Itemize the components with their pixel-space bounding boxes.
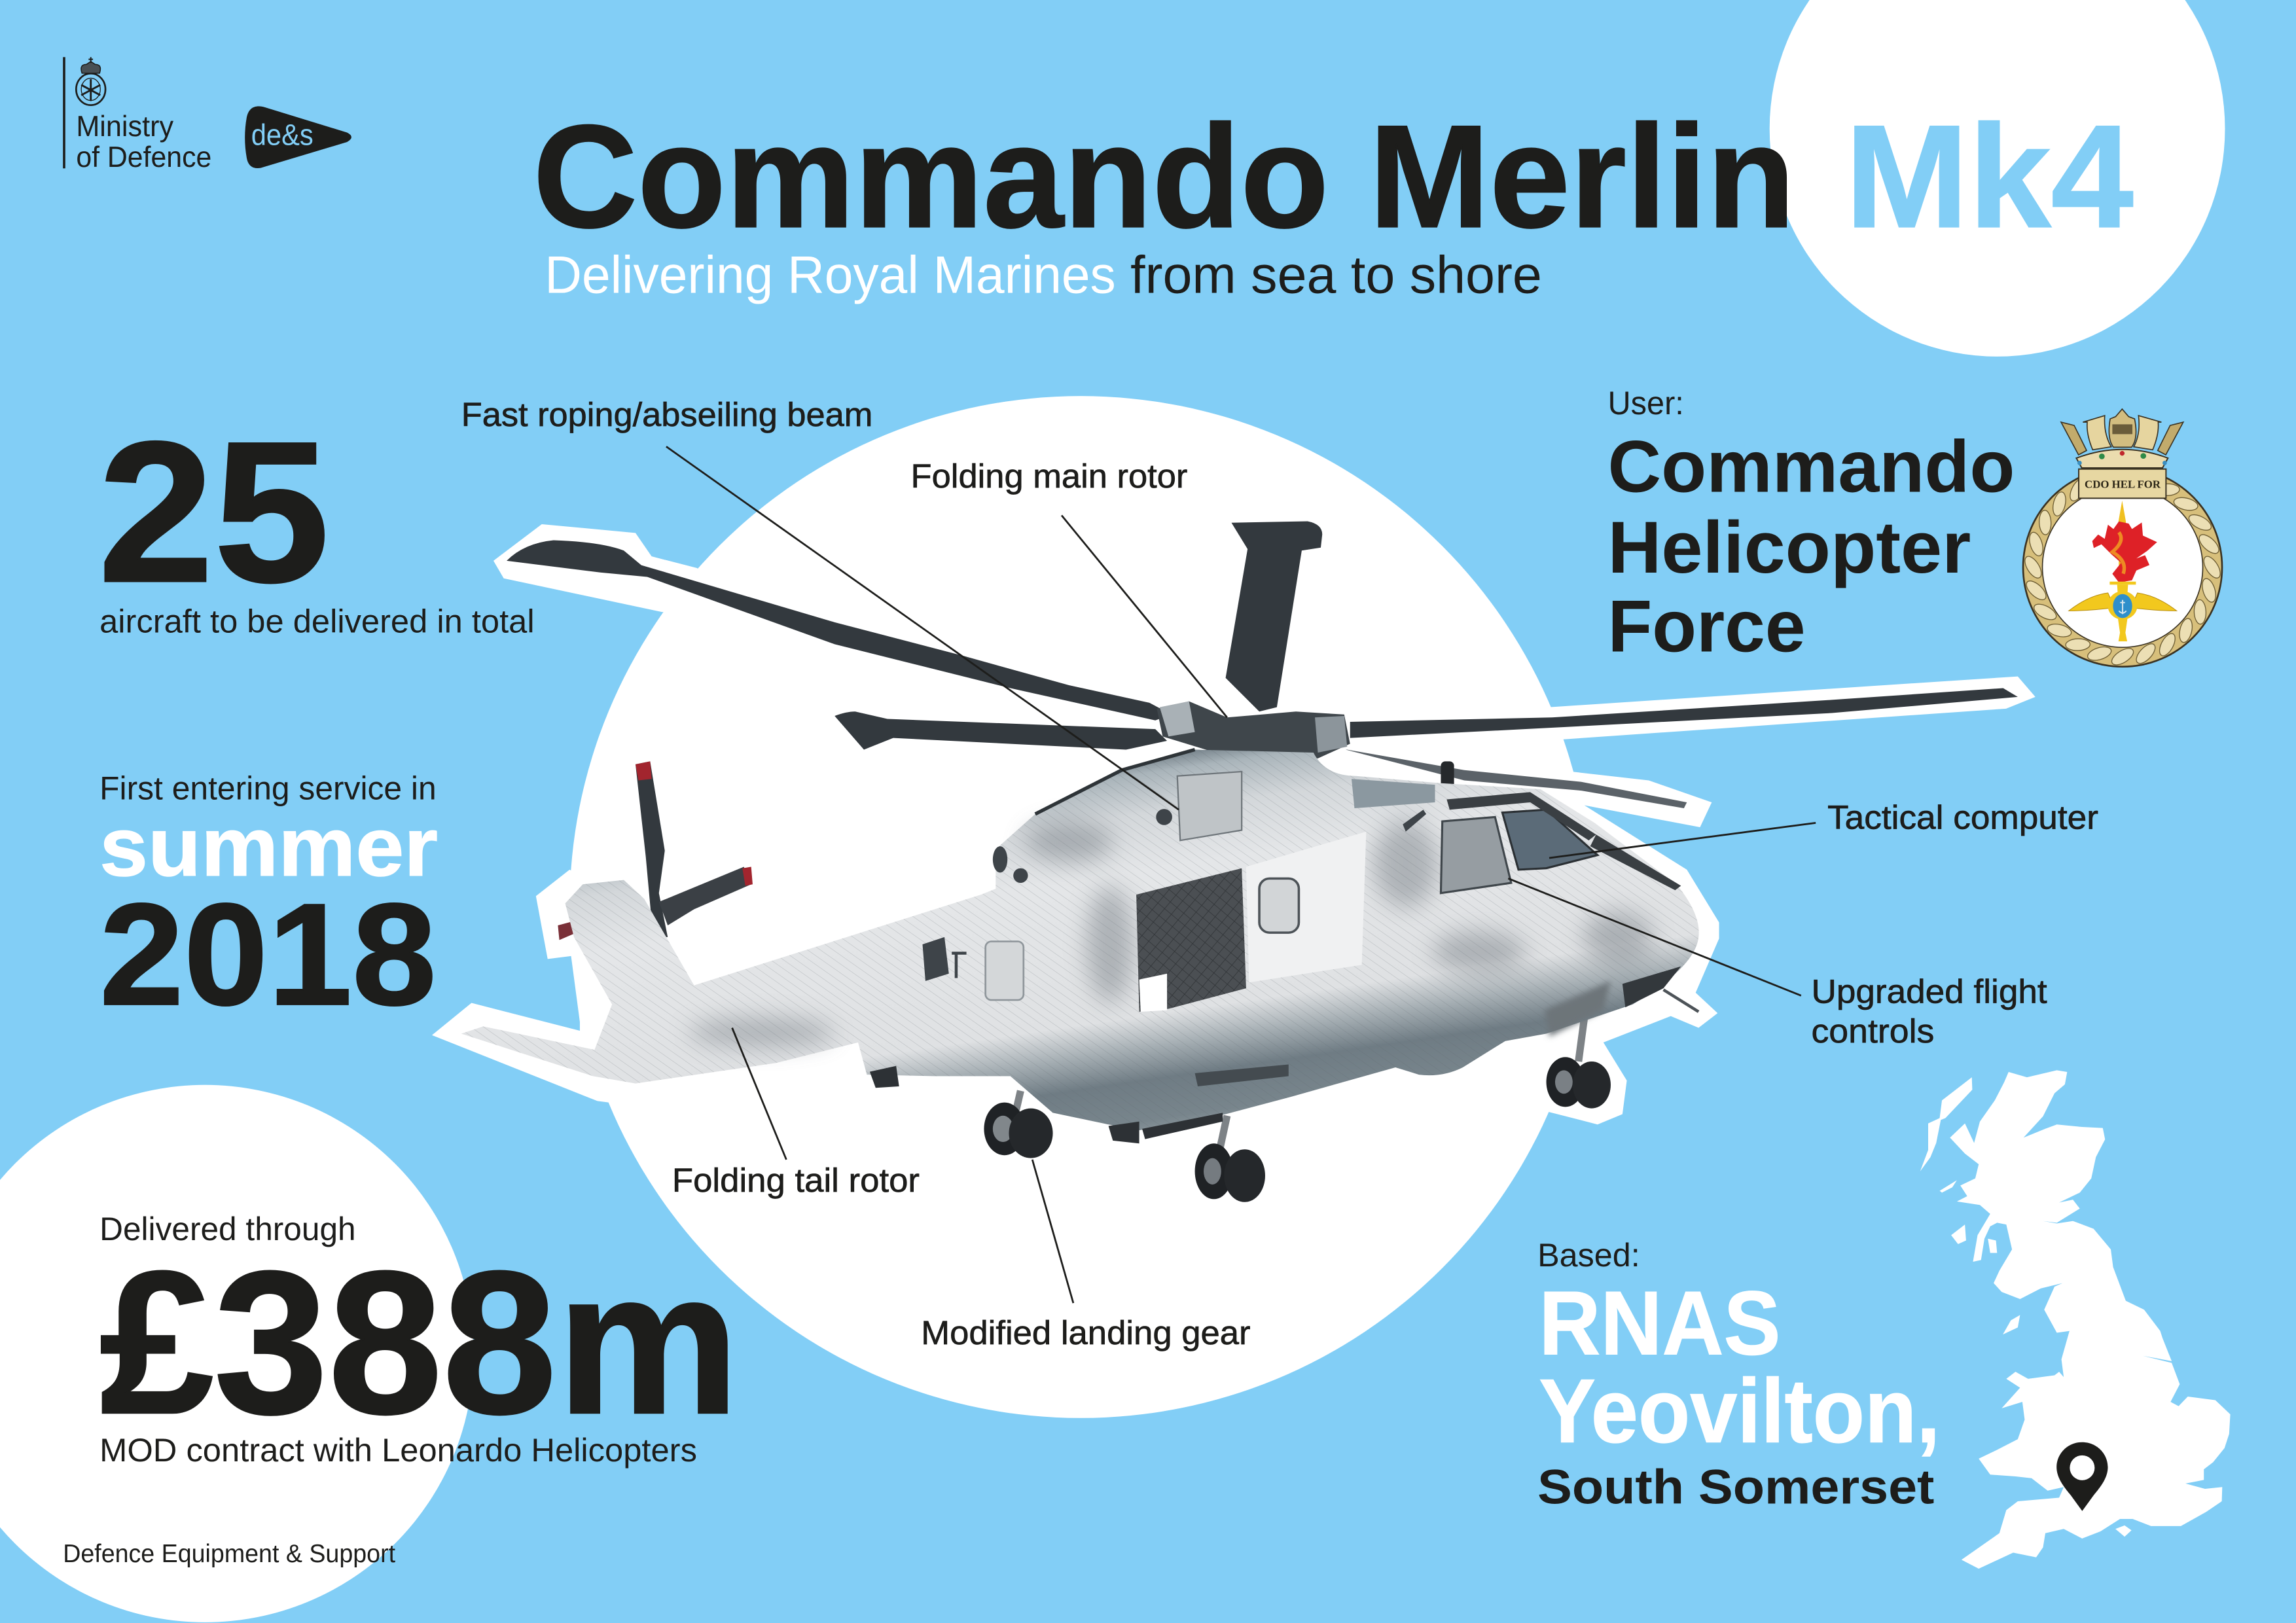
icon: MoD crest [76, 57, 105, 105]
subtitle [545, 245, 1542, 304]
logo: Ministry of Defence [63, 57, 211, 173]
user block [1607, 384, 2015, 668]
white circle: bottom left [0, 1085, 474, 1622]
wings and sword [2069, 582, 2177, 641]
base block: Based: [1537, 1236, 1640, 1274]
stat: summer 2018 [99, 770, 438, 1035]
main rotor blades [507, 521, 2018, 749]
landing gear [984, 1018, 1611, 1202]
white halo around helicopter [432, 524, 2036, 1142]
fuselage marks [922, 809, 1426, 981]
callout: Fast roping/abseiling beam: Fast roping/abseiling beam [461, 396, 872, 433]
rear window [986, 942, 1024, 1000]
stat: 25 aircraft: aircraft to be delivered in total [99, 602, 535, 639]
dragon [2092, 501, 2157, 582]
base block: RNAS [1539, 1272, 1780, 1374]
callout: Folding main rotor [911, 457, 1227, 717]
stat: summer 2018: First entering service in [99, 770, 437, 807]
fuselage texture [461, 749, 1699, 1130]
map of Great Britain [1920, 1070, 2231, 1569]
stat: 25 aircraft [98, 400, 535, 639]
stat: £388m contract: Delivered through [99, 1210, 356, 1247]
title: Commando Merlin [533, 95, 1795, 259]
callout: Modified landing gear [921, 1160, 1251, 1351]
upper hatch [1177, 772, 1242, 840]
rotor hub [1157, 702, 1687, 808]
logo: Ministry of Defence: of Defence [76, 141, 211, 173]
callout: Tactical computer [1549, 798, 2098, 858]
callout: Folding main rotor: Folding main rotor [911, 457, 1187, 495]
stat: summer 2018: 2018 [99, 874, 437, 1035]
gray strip behind cockpit [1352, 779, 1435, 808]
base block: South Somerset [1537, 1460, 1934, 1514]
fuselage [461, 749, 1699, 1130]
callout: Upgraded flight controls [1508, 878, 2047, 1050]
subtitle: Delivering Royal Marines [545, 245, 1116, 304]
white circle: top right [1770, 0, 2225, 357]
callout: Folding tail rotor [672, 1028, 920, 1199]
callout: Folding tail rotor: Folding tail rotor [672, 1162, 920, 1199]
stat: £388m contract: £388m [99, 1228, 740, 1456]
callout: Upgraded flight controls: controls [1811, 1012, 1934, 1050]
top edge highlight line [1035, 749, 1195, 814]
base block: Yeovilton, [1539, 1361, 1940, 1462]
crest plaque: CDO HEL FOR [2085, 478, 2161, 490]
cabin door opening [1136, 868, 1246, 1012]
sliding door panel [1246, 832, 1366, 982]
user block: Force [1607, 586, 1806, 668]
door window [1259, 878, 1299, 933]
logo: de&s [245, 106, 351, 168]
user block: User: [1607, 384, 1684, 421]
user block: Commando [1607, 426, 2015, 508]
tail rotor [558, 761, 753, 940]
subtitle: from sea to shore [1130, 245, 1542, 304]
stat: 25 aircraft: 25 [98, 400, 329, 624]
cockpit [1441, 792, 1698, 1037]
callout: Upgraded flight controls: Upgraded flight [1811, 973, 2047, 1010]
logo: Ministry of Defence: Ministry [76, 110, 174, 143]
icon: Commando Helicopter Force crest [2022, 409, 2223, 668]
base block [1537, 1236, 1940, 1514]
footer text: Defence Equipment & Support [63, 1540, 395, 1568]
title: Mk4 [1845, 95, 2134, 259]
callout: Tactical computer: Tactical computer [1827, 798, 2098, 836]
icon: location pin [2056, 1442, 2108, 1511]
fuselage belly details [870, 1064, 1289, 1143]
crest plaque [2079, 469, 2166, 498]
callout: Modified landing gear: Modified landing gear [921, 1314, 1251, 1351]
helicopter [432, 521, 2036, 1202]
white circle: centre [569, 396, 1592, 1418]
stat: summer 2018: summer [99, 801, 438, 894]
fuselage shading smudges [689, 820, 1653, 1047]
callout: Fast roping/abseiling beam [461, 396, 1179, 810]
user block: Helicopter [1607, 507, 1971, 588]
crown [2061, 409, 2183, 468]
stat: £388m contract: MOD contract with Leonardo Helicopters [99, 1431, 697, 1469]
logo: de&s: de&s [251, 117, 314, 151]
